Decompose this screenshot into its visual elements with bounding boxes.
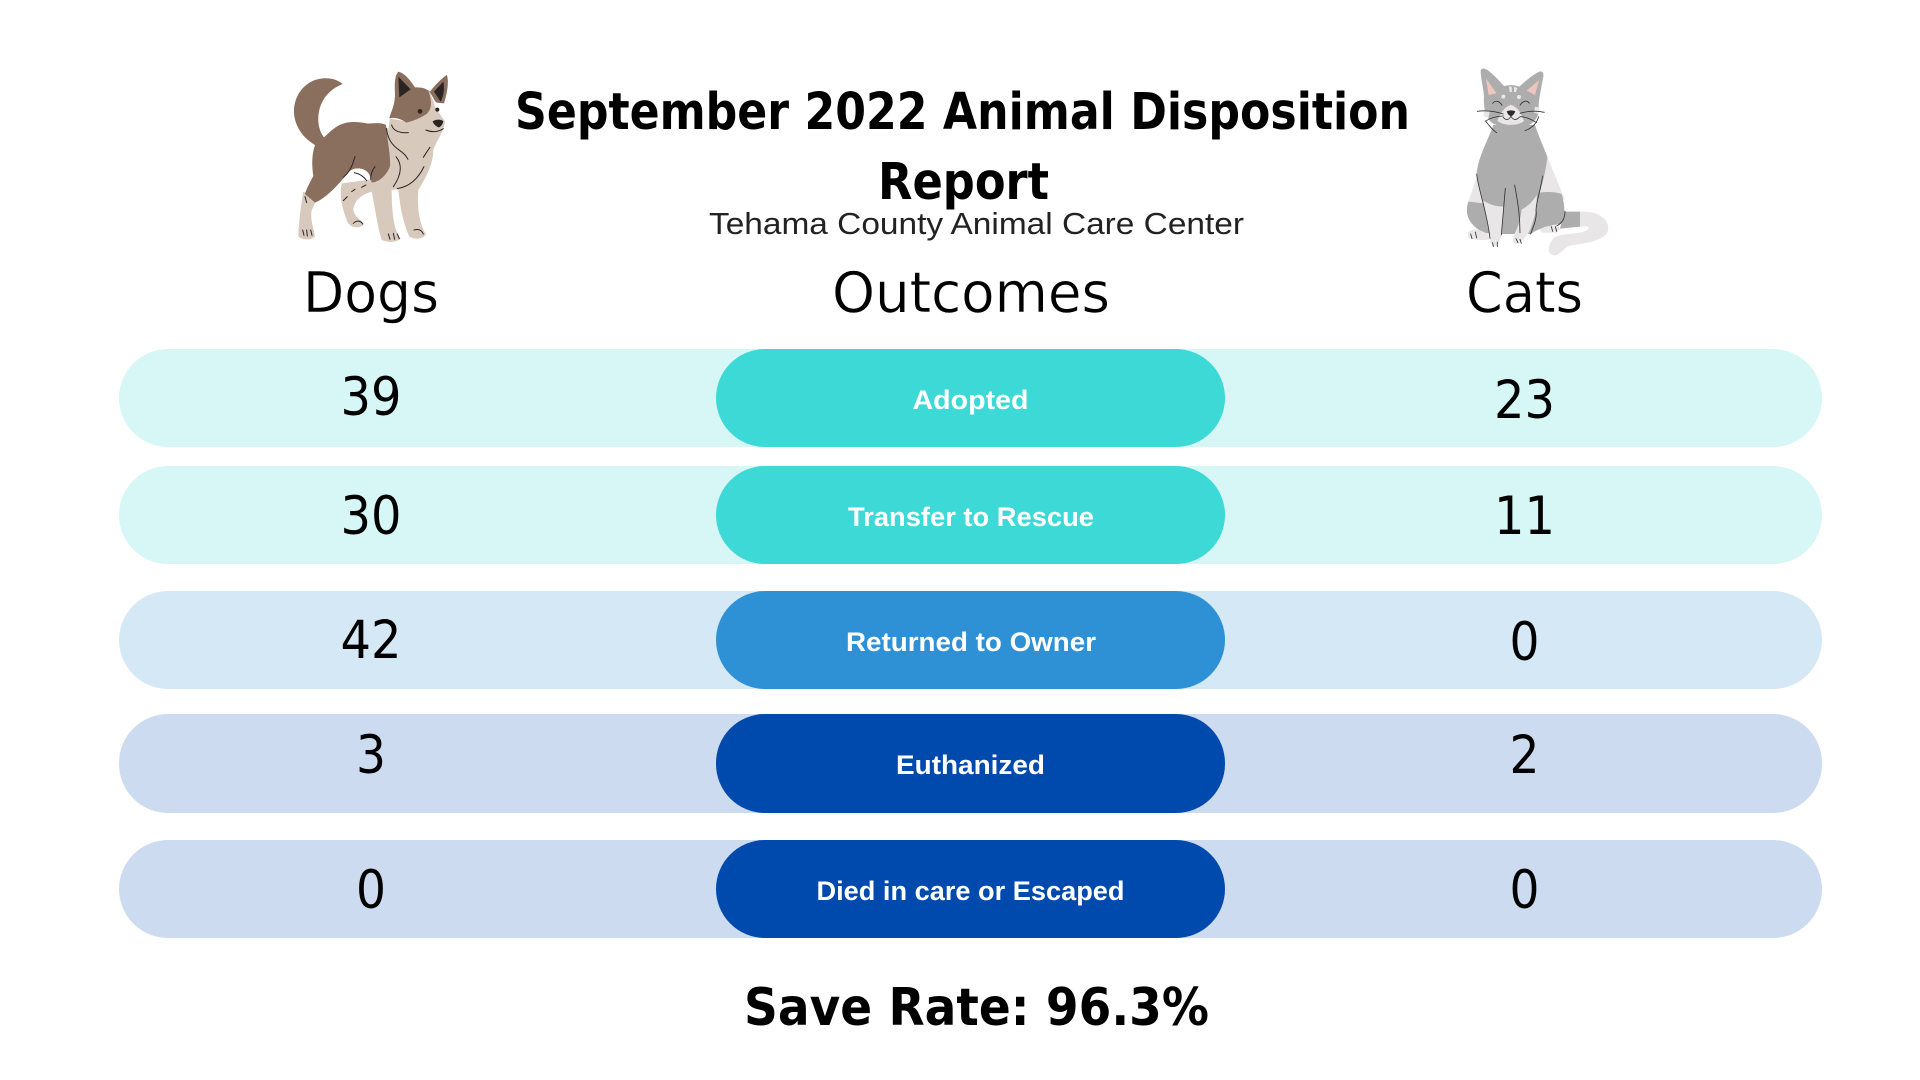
row: Adopted: 23 [1494, 370, 1555, 431]
row: Transfer to Rescue: 11 [1494, 486, 1555, 547]
row: Euthanized: 3 [356, 725, 386, 786]
row: Euthanized [119, 714, 1822, 813]
title: Report [878, 153, 1049, 212]
column heading: Cats: Cats [1466, 261, 1583, 326]
column heading: Outcomes: Outcomes [832, 261, 1110, 326]
row: Euthanized: 2 [1510, 725, 1540, 786]
row: Died in care or Escaped [119, 840, 1822, 938]
row: Adopted: 39 [340, 367, 402, 428]
row: Died in care or Escaped: 0 [1510, 860, 1540, 921]
save rate: Save Rate: 96.3% [744, 978, 1209, 1038]
subtitle: Tehama County Animal Care Center [709, 206, 1244, 241]
icon: cat illustration [1467, 69, 1608, 255]
row: Returned to Owner: 42 [340, 610, 402, 671]
row: Euthanized: Euthanized [896, 750, 1045, 780]
row: Transfer to Rescue: 30 [340, 486, 402, 547]
row: Died in care or Escaped: Died in care or Escaped [816, 876, 1124, 906]
row: Returned to Owner: 0 [1510, 612, 1540, 673]
row: Returned to Owner: Returned to Owner [846, 627, 1097, 657]
row: Transfer to Rescue [119, 466, 1822, 564]
row: Returned to Owner [119, 591, 1822, 689]
row: Adopted: Adopted [912, 385, 1028, 415]
row: Adopted [119, 349, 1822, 447]
title [515, 83, 1410, 212]
title: September 2022 Animal Disposition [515, 83, 1410, 142]
column heading: Dogs: Dogs [303, 261, 439, 326]
icon: dog illustration [294, 72, 448, 242]
row: Transfer to Rescue: Transfer to Rescue [848, 502, 1094, 532]
row: Died in care or Escaped: 0 [356, 860, 386, 921]
